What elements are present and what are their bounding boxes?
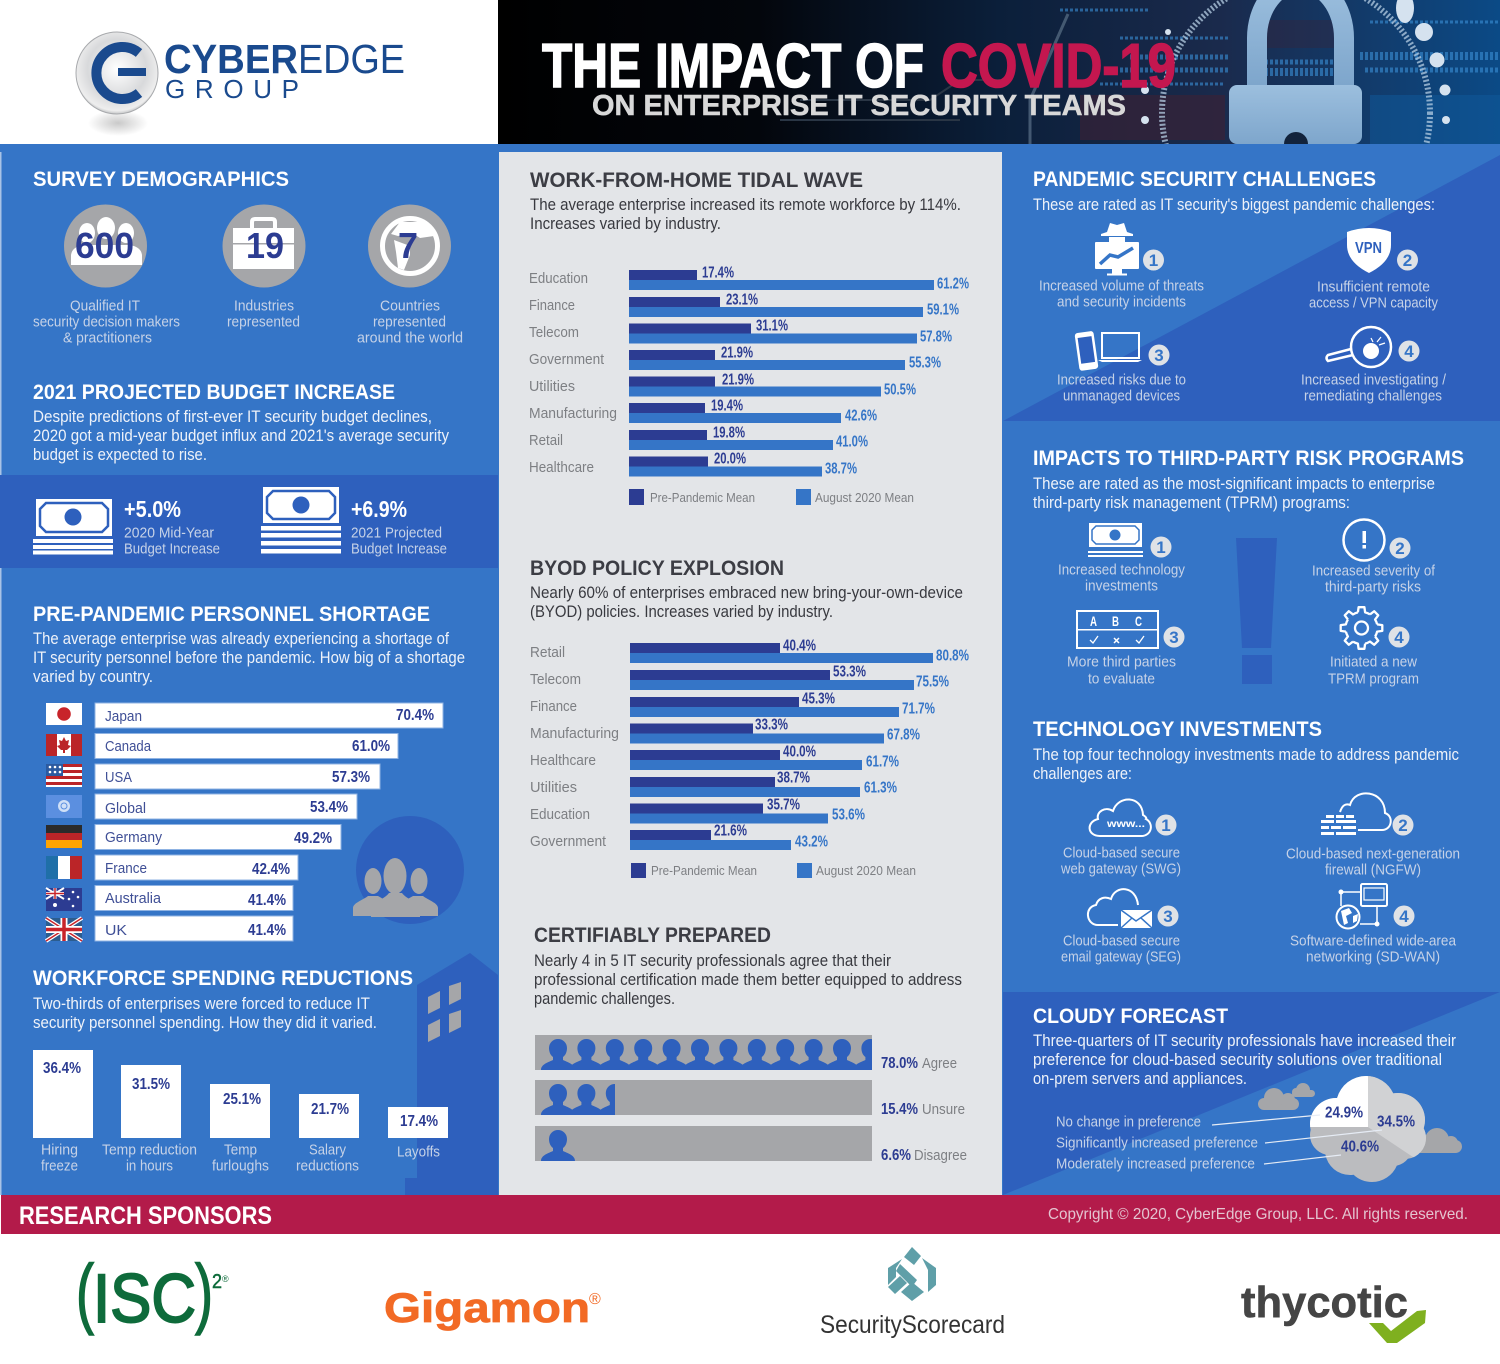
panel: workforce spending: Two-thirds of enterprises were forced to reduce IT	[33, 994, 370, 1013]
panel: certifiably prepared	[534, 924, 967, 1164]
item: SD-WAN: Software-defined wide-area	[1290, 932, 1457, 950]
item: more third parties	[1067, 611, 1184, 688]
panel: certifiably prepared: CERTIFIABLY PREPARED	[534, 924, 771, 947]
badge 1: 1	[1156, 538, 1166, 557]
title: THE IMPACT OF	[542, 32, 924, 101]
icon: money stack one	[33, 499, 113, 554]
pictogram: agree	[535, 1035, 957, 1072]
icon: email cloud	[1088, 889, 1152, 928]
bar chart: remote workforce by industry: Healthcare	[529, 459, 594, 476]
badge 3: 3	[1163, 907, 1173, 926]
bar chart: reductions: 17.4%	[400, 1113, 438, 1130]
bar chart: remote workforce by industry: 55.3%	[909, 354, 941, 372]
panel: third-party risk: third-party risk management (TPRM) programs:	[1033, 493, 1350, 512]
icon: network	[1336, 884, 1387, 928]
icon: UN flag	[46, 795, 82, 818]
icon: people in circle	[353, 816, 464, 924]
panel: certifiably prepared: professional certification made them better equipped to address	[534, 970, 962, 989]
bar chart: remote workforce by industry: 23.1%	[726, 292, 758, 308]
bar chart: BYOD by industry: 61.3%	[864, 780, 897, 796]
country bars: Australia	[105, 890, 162, 907]
budget band: Budget Increase	[124, 540, 220, 558]
pictogram: unsure	[535, 1080, 965, 1118]
panel: budget increase	[0, 381, 498, 568]
stat: 600 qualified: Qualified IT	[70, 298, 140, 314]
panel: workforce spending: WORKFORCE SPENDING REDUCTIONS	[33, 967, 413, 990]
item: technology investments: investments	[1085, 578, 1158, 594]
item: more third parties: to evaluate	[1088, 670, 1155, 688]
panel: cloudy forecast: CLOUDY FORECAST	[1033, 1005, 1228, 1028]
stat: 600 qualified: 600	[75, 225, 134, 266]
country bars: Germany	[105, 829, 162, 846]
item: VPN: Insufficient remote	[1317, 278, 1430, 296]
panel: third-party risk: These are rated as the most-significant impacts to enterprise	[1033, 474, 1435, 493]
budget band: 2020 Mid-Year	[124, 524, 214, 542]
logo: ISC2: ®	[222, 1274, 229, 1284]
badge 4	[1394, 906, 1414, 926]
bar chart: BYOD by industry: 75.5%	[916, 674, 949, 690]
logo: SecurityScorecard: SecurityScorecard	[820, 1311, 1005, 1339]
country bars: 57.3%	[332, 769, 370, 786]
pictogram: unsure: Unsure	[922, 1101, 965, 1118]
panel: pandemic security challenges: PANDEMIC SECURITY CHALLENGES	[1033, 168, 1376, 191]
bar chart: reductions: reductions	[296, 1158, 359, 1174]
item: investigating	[1301, 327, 1447, 404]
budget band	[0, 475, 498, 568]
badge 1: 1	[1161, 816, 1171, 835]
logo: Gigamon: ®	[589, 1291, 601, 1308]
panel: cloudy forecast: preference for cloud-based security solutions over traditional	[1033, 1050, 1442, 1069]
bar chart: remote workforce by industry: 20.0%	[714, 450, 746, 468]
panel: BYOD policy explosion: BYOD POLICY EXPLOSION	[530, 557, 784, 580]
bar chart: BYOD by industry: Manufacturing	[530, 725, 619, 742]
country bars: 41.4%	[248, 892, 286, 909]
chart: cloud pie: 34.5%	[1377, 1114, 1415, 1130]
item: VPN	[1309, 228, 1438, 312]
icon: spy at monitor	[1095, 223, 1139, 276]
item: severity	[1312, 520, 1436, 596]
legend: August 2020 Mean	[815, 490, 914, 505]
bar chart: reductions: freeze	[41, 1158, 78, 1174]
legend	[629, 489, 914, 505]
panel: certifiably prepared: Nearly 4 in 5 IT security professionals agree that their	[534, 951, 891, 970]
icon: alert circle	[1344, 520, 1384, 560]
country bars: Global	[105, 800, 146, 817]
badge 2: 2	[1403, 251, 1412, 270]
country bars: 41.4%	[248, 922, 286, 939]
stat: 19 industries: represented	[227, 314, 300, 330]
logo: CyberEdge Group: GROUP	[165, 74, 299, 104]
stat: 7 countries: represented	[373, 314, 446, 330]
item: SD-WAN	[1290, 884, 1457, 966]
bar chart: reductions: Temp	[224, 1142, 257, 1158]
icon: flag of USA	[46, 764, 82, 787]
bar chart: reductions: 25.1%	[223, 1091, 261, 1108]
stat: 600 qualified: security decision makers	[33, 314, 180, 330]
icon: ABC table: B	[1112, 613, 1119, 629]
country bars: UK	[105, 922, 127, 939]
badge 3: 3	[1154, 346, 1164, 365]
bar chart: remote workforce by industry: 42.6%	[845, 408, 877, 424]
bar chart: reductions: Salary	[309, 1142, 346, 1158]
stat: 7 countries: 7	[398, 225, 418, 266]
bar chart: BYOD by industry: 80.8%	[936, 648, 969, 664]
icon: flag of Canada	[46, 734, 82, 756]
bar chart: reductions: 21.7%	[311, 1101, 349, 1118]
panel: certifiably prepared: pandemic challenges.	[534, 989, 675, 1008]
bar chart: remote workforce by industry: Education	[529, 270, 588, 287]
bar chart: remote workforce by industry: Finance	[529, 297, 575, 314]
pictogram: disagree: Disagree	[914, 1147, 967, 1164]
pictogram: disagree	[535, 1126, 967, 1164]
panel: survey demographics: SURVEY DEMOGRAPHICS	[33, 168, 289, 191]
panel: BYOD policy explosion: (BYOD) policies. Increases varied by industry.	[530, 602, 833, 621]
item: devices	[1057, 331, 1186, 404]
item: NGFW: Cloud-based next-generation	[1286, 846, 1460, 862]
bar chart: BYOD by industry: 21.6%	[714, 822, 747, 840]
legend: Significantly increased preference	[1056, 1134, 1258, 1152]
bar chart: remote workforce by industry: Government	[529, 351, 605, 368]
panel: cloudy forecast	[1033, 1005, 1462, 1190]
panel: work-from-home tidal wave: The average enterprise increased its remote workforce by 114%.	[530, 195, 961, 214]
badge 2: 2	[1398, 816, 1408, 835]
badge 3: 3	[1169, 628, 1179, 647]
item: more third parties: More third parties	[1067, 654, 1176, 670]
panel: technology investments	[1033, 718, 1460, 966]
item: NGFW	[1286, 793, 1460, 878]
panel: cloudy forecast: Three-quarters of IT security professionals have increased their	[1033, 1031, 1456, 1050]
item: SWG: web gateway (SWG)	[1060, 860, 1181, 878]
budget band: +5.0%	[124, 496, 181, 522]
stat: 600 qualified: & practitioners	[63, 330, 152, 346]
bar chart: reductions: in hours	[126, 1158, 173, 1174]
item: SEG: Cloud-based secure	[1063, 932, 1180, 950]
bar chart: BYOD by industry: 33.3%	[755, 716, 788, 734]
logo: ISC2: ISC	[93, 1260, 196, 1337]
panel: personnel shortage: PRE-PANDEMIC PERSONNEL SHORTAGE	[33, 603, 430, 626]
stat: 19 industries	[222, 204, 306, 330]
bar chart: remote workforce by industry	[529, 264, 969, 505]
icon: VPN shield: VPN	[1355, 240, 1382, 257]
icon: ABC table: A	[1090, 613, 1097, 629]
item: devices: Increased risks due to	[1057, 372, 1186, 388]
panel: workforce spending	[33, 953, 498, 1195]
icon: flag of UK	[46, 918, 82, 941]
country bars: 49.2%	[294, 830, 332, 847]
bar chart: remote workforce by industry: 31.1%	[756, 318, 788, 334]
copyright: Copyright © 2020, CyberEdge Group, LLC. All rights reserved.	[1048, 1206, 1468, 1223]
icon: money stack	[1088, 523, 1143, 557]
stat: 7 countries: around the world	[357, 330, 463, 346]
chart: cloud pie: 24.9%	[1325, 1104, 1363, 1122]
bar chart: BYOD by industry: 40.4%	[783, 638, 816, 654]
icon: ABC table: C	[1135, 613, 1142, 629]
bar chart: remote workforce by industry: 21.9%	[722, 372, 754, 388]
bar chart: reductions: furloughs	[212, 1158, 269, 1174]
bar chart: BYOD by industry: 35.7%	[767, 796, 800, 814]
logo: ISC2	[76, 1248, 229, 1337]
item: technology investments	[1058, 523, 1185, 594]
item: SWG: Cloud-based secure	[1063, 844, 1180, 862]
legend	[631, 863, 916, 878]
badge 2: 2	[1395, 539, 1405, 558]
badge 4: 4	[1394, 628, 1404, 647]
stat: 7 countries	[357, 204, 463, 346]
bar chart: remote workforce by industry: 38.7%	[825, 460, 857, 478]
budget band: Budget Increase	[351, 540, 447, 558]
badge 2	[1392, 814, 1414, 836]
bar chart: remote workforce by industry: 61.2%	[937, 276, 969, 292]
bar chart: remote workforce by industry: Utilities	[529, 378, 575, 395]
item: new TPRM program: Initiated a new	[1330, 654, 1417, 670]
country bars	[95, 703, 443, 941]
chart: cloud pie: 40.6%	[1341, 1138, 1379, 1156]
bar chart: remote workforce by industry: Retail	[529, 432, 563, 449]
header banner	[498, 0, 1500, 144]
item: severity: Increased severity of	[1312, 562, 1436, 580]
badge 4	[1398, 340, 1420, 362]
bar chart: remote workforce by industry: 19.4%	[711, 398, 743, 414]
icon: firewall cloud	[1321, 793, 1391, 835]
budget band: 2021 Projected	[351, 524, 442, 542]
panel: budget increase: 2021 PROJECTED BUDGET INCREASE	[33, 381, 395, 404]
panel: personnel shortage	[33, 603, 465, 941]
bar chart: BYOD by industry: Retail	[530, 644, 565, 661]
icon: flag of Australia	[46, 888, 82, 911]
panel: third-party risk: IMPACTS TO THIRD-PARTY RISK PROGRAMS	[1033, 447, 1464, 470]
panel: third-party risk	[1033, 447, 1464, 688]
bar chart: BYOD by industry: 71.7%	[902, 700, 935, 718]
bar chart: remote workforce by industry: 41.0%	[836, 434, 868, 450]
item: investigating: remediating challenges	[1304, 388, 1442, 404]
bar chart: remote workforce by industry: 59.1%	[927, 302, 959, 318]
item: new TPRM program: TPRM program	[1328, 670, 1419, 688]
heading: research sponsors: RESEARCH SPONSORS	[19, 1202, 272, 1230]
bar chart: BYOD by industry	[530, 638, 969, 878]
panel: BYOD policy explosion: Nearly 60% of enterprises embraced new bring-your-own-device	[530, 583, 963, 602]
panel: technology investments: challenges are:	[1033, 764, 1132, 783]
country bars: Japan	[105, 708, 142, 725]
bar chart: BYOD by industry: 43.2%	[795, 834, 828, 850]
icon: flag of Germany	[46, 825, 82, 848]
bar chart: remote workforce by industry: Telecom	[529, 324, 579, 341]
country bars: 70.4%	[396, 707, 434, 724]
country bars: France	[105, 860, 147, 877]
panel: budget increase: 2020 got a mid-year budget influx and 2021's average security	[33, 426, 449, 445]
item: VPN: access / VPN capacity	[1309, 294, 1438, 312]
footer banner	[1, 1195, 1500, 1234]
title: ON ENTERPRISE IT SECURITY TEAMS	[592, 90, 1126, 122]
logo: thycotic	[1241, 1278, 1426, 1343]
legend: Pre-Pandemic Mean	[651, 863, 757, 878]
badge 4: 4	[1399, 907, 1409, 926]
legend: August 2020 Mean	[816, 863, 916, 878]
legend: Pre-Pandemic Mean	[650, 490, 755, 505]
item: new TPRM program	[1328, 607, 1419, 688]
panel: work-from-home tidal wave	[529, 169, 969, 505]
panel: BYOD policy explosion	[530, 557, 969, 878]
stat: 600 qualified	[33, 204, 180, 346]
legend: No change in preference	[1056, 1114, 1201, 1130]
panel: work-from-home tidal wave: WORK-FROM-HOME TIDAL WAVE	[530, 169, 863, 192]
bar chart: BYOD by industry: Healthcare	[530, 752, 596, 769]
icon: flag of Japan	[46, 703, 82, 725]
icon: small clouds	[1258, 1083, 1462, 1153]
bar chart: BYOD by industry: Finance	[530, 698, 577, 715]
bar chart: BYOD by industry: 53.6%	[832, 806, 865, 824]
pictogram: unsure: 15.4%	[881, 1101, 918, 1118]
pictogram: disagree: 6.6%	[881, 1147, 911, 1164]
panel: workforce spending: security personnel spending. How they did it varied.	[33, 1013, 377, 1032]
country bars: 53.4%	[310, 799, 348, 816]
item: SWG	[1060, 799, 1181, 878]
logo: CyberEdge Group: CYBER	[164, 36, 298, 82]
logo: thycotic: thycotic	[1241, 1278, 1408, 1327]
bar chart: reductions: Temp reduction	[102, 1142, 197, 1158]
country bars: 61.0%	[352, 738, 390, 755]
item: SD-WAN: networking (SD-WAN)	[1306, 948, 1440, 966]
logo: ISC2: )	[195, 1248, 213, 1336]
logo: SecurityScorecard	[820, 1247, 1005, 1339]
logo: ISC2: (	[76, 1248, 94, 1336]
badge 1: 1	[1149, 251, 1158, 270]
bar chart: remote workforce by industry: 50.5%	[884, 382, 916, 398]
panel: pandemic security challenges	[1033, 168, 1447, 404]
icon: money stack two	[261, 487, 341, 554]
bar chart: reductions: Layoffs	[397, 1144, 440, 1160]
item: devices: unmanaged devices	[1063, 388, 1180, 404]
bar chart: BYOD by industry: 53.3%	[833, 664, 866, 680]
item: investigating: Increased investigating /	[1301, 372, 1447, 388]
bar chart: BYOD by industry: 67.8%	[887, 726, 920, 744]
bar chart: BYOD by industry: Telecom	[530, 671, 581, 688]
logo: Gigamon: Gigamon	[384, 1284, 590, 1331]
bar chart: BYOD by industry: 40.0%	[783, 744, 816, 760]
badge 1	[1143, 250, 1164, 270]
pictogram: agree: 78.0%	[881, 1055, 918, 1072]
title	[542, 42, 1175, 116]
icon: large exclamation mark	[1236, 538, 1277, 684]
bar chart: reductions: 36.4%	[43, 1060, 81, 1077]
country bars: 42.4%	[252, 861, 290, 878]
bar chart: reductions	[33, 1050, 448, 1174]
item: severity: third-party risks	[1325, 578, 1421, 596]
item: technology investments: Increased technology	[1058, 562, 1185, 578]
bar chart: BYOD by industry: Government	[530, 833, 607, 850]
item: SEG	[1061, 889, 1181, 966]
bar chart: remote workforce by industry: 57.8%	[920, 328, 952, 346]
item: SEG: email gateway (SEG)	[1061, 948, 1181, 966]
bar chart: reductions: 31.5%	[132, 1076, 170, 1093]
logo: CyberEdge Group: EDGE	[298, 36, 405, 82]
icon: flag of France	[46, 856, 82, 879]
item: NGFW: firewall (NGFW)	[1325, 862, 1421, 878]
panel: survey demographics	[33, 168, 463, 346]
icon: ABC table	[1077, 611, 1158, 648]
panel: budget increase: Despite predictions of first-ever IT security budget declines,	[33, 407, 432, 426]
panel: personnel shortage: IT security personnel before the pandemic. How big of a shortage	[33, 648, 465, 667]
bar chart: reductions: Hiring	[41, 1142, 78, 1158]
panel: cloudy forecast: on-prem servers and appliances.	[1033, 1069, 1247, 1088]
stat: 19 industries: 19	[246, 225, 284, 266]
chart: cloud pie	[1310, 1076, 1426, 1182]
pictogram: agree: Agree	[922, 1055, 957, 1072]
panel: budget increase: budget is expected to rise.	[33, 445, 207, 464]
bar chart: BYOD by industry: 45.3%	[802, 690, 835, 708]
badge 4: 4	[1404, 342, 1414, 361]
bar chart: BYOD by industry: 38.7%	[777, 770, 810, 786]
budget band: +6.9%	[351, 496, 407, 522]
country bars: USA	[105, 769, 132, 786]
title: COVID-19	[941, 32, 1176, 101]
bar chart: BYOD by industry: Utilities	[530, 779, 577, 796]
bar chart: remote workforce by industry: 17.4%	[702, 264, 734, 282]
stat: 19 industries: Industries	[234, 298, 294, 314]
country bars: Canada	[105, 738, 152, 755]
bar chart: remote workforce by industry: 19.8%	[713, 424, 745, 442]
logo: CyberEdge Group	[76, 32, 405, 136]
stat: 7 countries: Countries	[380, 298, 440, 314]
item: threats: Increased volume of threats	[1039, 278, 1204, 294]
bar chart: BYOD by industry: Education	[530, 806, 590, 823]
panel: work-from-home tidal wave: Increases varied by industry.	[530, 214, 721, 233]
panel: technology investments: TECHNOLOGY INVESTMENTS	[1033, 718, 1322, 741]
icon: magnifier and bomb	[1326, 327, 1391, 367]
bar chart: BYOD by industry: 61.7%	[866, 754, 899, 770]
icon: building	[405, 953, 498, 1195]
legend	[1056, 1114, 1382, 1172]
item: threats: and security incidents	[1057, 294, 1186, 310]
panel: personnel shortage: The average enterprise was already experiencing a shortage of	[33, 629, 449, 648]
bar chart: remote workforce by industry: Manufacturing	[529, 405, 617, 422]
item: threats	[1039, 223, 1204, 310]
icon: phone and laptop	[1074, 331, 1142, 371]
bar chart: remote workforce by industry: 21.9%	[721, 344, 753, 362]
logo: ISC2: 2	[212, 1271, 222, 1293]
panel: pandemic security challenges: These are rated as IT security's biggest pandemic challenges:	[1033, 195, 1435, 214]
panel: personnel shortage: varied by country.	[33, 667, 153, 686]
legend: Moderately increased preference	[1056, 1156, 1255, 1172]
icon: gear	[1341, 607, 1382, 649]
icon: www cloud: www...	[1106, 819, 1145, 830]
